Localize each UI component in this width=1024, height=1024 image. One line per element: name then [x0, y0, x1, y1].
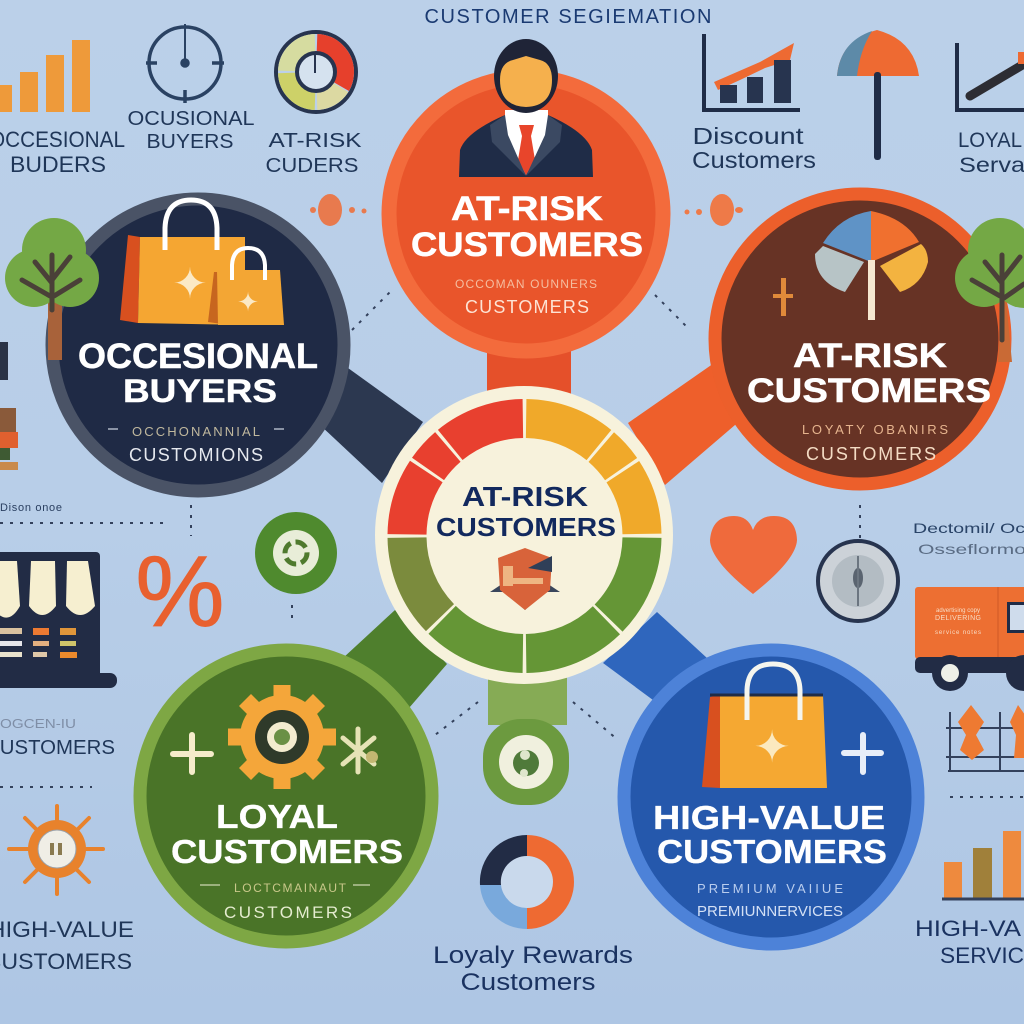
icon: donut gauge [276, 32, 356, 112]
label: occasional buyers: OCUSIONAL [128, 108, 254, 130]
panel: center gauge: CUSTOMERS [436, 512, 616, 542]
label: occasional buyers left [0, 127, 125, 177]
label: occasional buyers left: BUDERS [10, 152, 106, 177]
label: right small text: Dectomil/ Oc [913, 520, 1024, 536]
title: CUSTOMER SEGIEMATION [424, 6, 712, 28]
heading: OCCESIONAL [78, 337, 318, 376]
icon: gear [228, 685, 336, 789]
panel: center gauge [358, 370, 691, 702]
icon: shopping bags: ✦ [172, 260, 208, 307]
label: occasional buyers: BUYERS [146, 131, 234, 153]
label: high-value services: HIGH-VA [915, 916, 1021, 941]
icon: shield [490, 548, 560, 610]
icon: coin [818, 541, 898, 621]
panel: top at-risk customers: CUSTOMERS [465, 297, 589, 317]
panel: high-value customers: CUSTOMERS [657, 833, 887, 870]
panel: loyal customers [140, 650, 432, 942]
label: loyalty rewards customers: Loyaly Rewards [433, 942, 633, 969]
panel: right at-risk customers: CUSTOMERS [747, 372, 991, 410]
label: discount customers: Customers [692, 147, 816, 173]
label: discount customers [692, 123, 816, 173]
icon: heart [710, 516, 797, 594]
icon: small green badge bottom [483, 719, 569, 805]
icon: shopping bags [120, 200, 284, 325]
icon: clock [146, 24, 224, 103]
icon: right bar chart [942, 831, 1024, 899]
label: high-value services [915, 916, 1024, 968]
panel: right at-risk customers: CUSTOMERS [806, 444, 936, 464]
icon: left tree [5, 218, 99, 360]
icon: sparkle [343, 729, 378, 772]
icon: umbrella [773, 211, 928, 320]
icon: right small chart pieces [946, 705, 1024, 772]
panel: loyal customers: CUSTOMERS [171, 833, 403, 870]
icon: delivery truck: DELIVERING [935, 615, 981, 622]
icon: umbrella top [837, 30, 919, 160]
panel: top at-risk customers [389, 39, 663, 351]
text block: LOYATY OBANIRS [802, 422, 948, 437]
heading: AT-RISK [462, 481, 588, 512]
icon: delivery truck: advertising copy [936, 608, 980, 614]
ring segments [358, 370, 691, 702]
label: loyalty services: LOYAL [958, 129, 1022, 152]
heading: LOYAL [216, 798, 338, 835]
icon: businessman [459, 39, 593, 177]
label: right small text [913, 520, 1024, 557]
label: at-risk left: CUDERS [266, 155, 358, 177]
icon: delivery truck [915, 587, 1024, 691]
label: at-risk left: AT-RISK [268, 130, 362, 152]
label: loyalty services [958, 129, 1024, 177]
icon: delivery truck: service notes [935, 630, 981, 636]
label: high-value customers left [0, 917, 134, 974]
icon: plus [844, 735, 881, 772]
icon: percent: % [136, 536, 224, 648]
panel: high-value customers [624, 650, 918, 944]
icon: right tree [955, 218, 1024, 362]
icon: bottom donut [480, 835, 574, 929]
panel: occasional buyers [52, 199, 344, 491]
icon: small connector dots top right [684, 194, 743, 226]
icon: storefront [0, 552, 117, 688]
panel: occasional buyers: BUYERS [123, 373, 277, 409]
heading: AT-RISK [451, 190, 603, 228]
panel: right at-risk customers [715, 194, 1005, 484]
label: occasional buyers [128, 108, 254, 153]
panel: high-value customers: PREMIUNNERVICES [697, 903, 843, 920]
dashed connectors [0, 290, 1024, 797]
label: loyalty rewards customers: Customers [460, 969, 596, 996]
icon: left edge house [0, 342, 18, 470]
heading: AT-RISK [793, 337, 948, 375]
label: loyalty services: Serva [959, 154, 1024, 177]
label: lower left customers: OGCEN-IU [0, 716, 76, 731]
label: at-risk left [266, 130, 362, 177]
label: lower left customers [0, 716, 115, 759]
connectors to center [320, 345, 770, 730]
label: right small text: Osseflormo [918, 541, 1024, 557]
icon: top-left bar chart [0, 40, 90, 112]
icon: shopping bags: ✦ [237, 287, 259, 317]
text block: LOCTCMAINAUT [234, 881, 347, 895]
icon: shopping bag: ✦ [754, 723, 790, 772]
icon: chart far right [957, 43, 1024, 110]
text block: OCCOMAN OUNNERS [455, 277, 597, 291]
label: small left text: Dison onoe [0, 502, 62, 514]
icon: shopping bag [702, 664, 827, 788]
label: high-value services: SERVIC [940, 943, 1024, 968]
panel: loyal customers: CUSTOMERS [224, 903, 352, 922]
label: loyalty rewards customers [433, 942, 633, 996]
panel: top at-risk customers: CUSTOMERS [411, 226, 643, 264]
text block: PREMIUM VAIIUE [697, 881, 843, 896]
label: discount customers: Discount [692, 123, 804, 149]
icon: plus [173, 735, 211, 772]
text block: OCCHONANNIAL [132, 424, 260, 439]
icon: small connector dots top left [310, 194, 366, 226]
heading: HIGH-VALUE [653, 799, 885, 836]
icon: line chart top right [704, 34, 800, 110]
icon: orange sun gear [9, 806, 103, 894]
panel: occasional buyers: CUSTOMIONS [129, 445, 263, 465]
icon: green badge [255, 512, 337, 594]
